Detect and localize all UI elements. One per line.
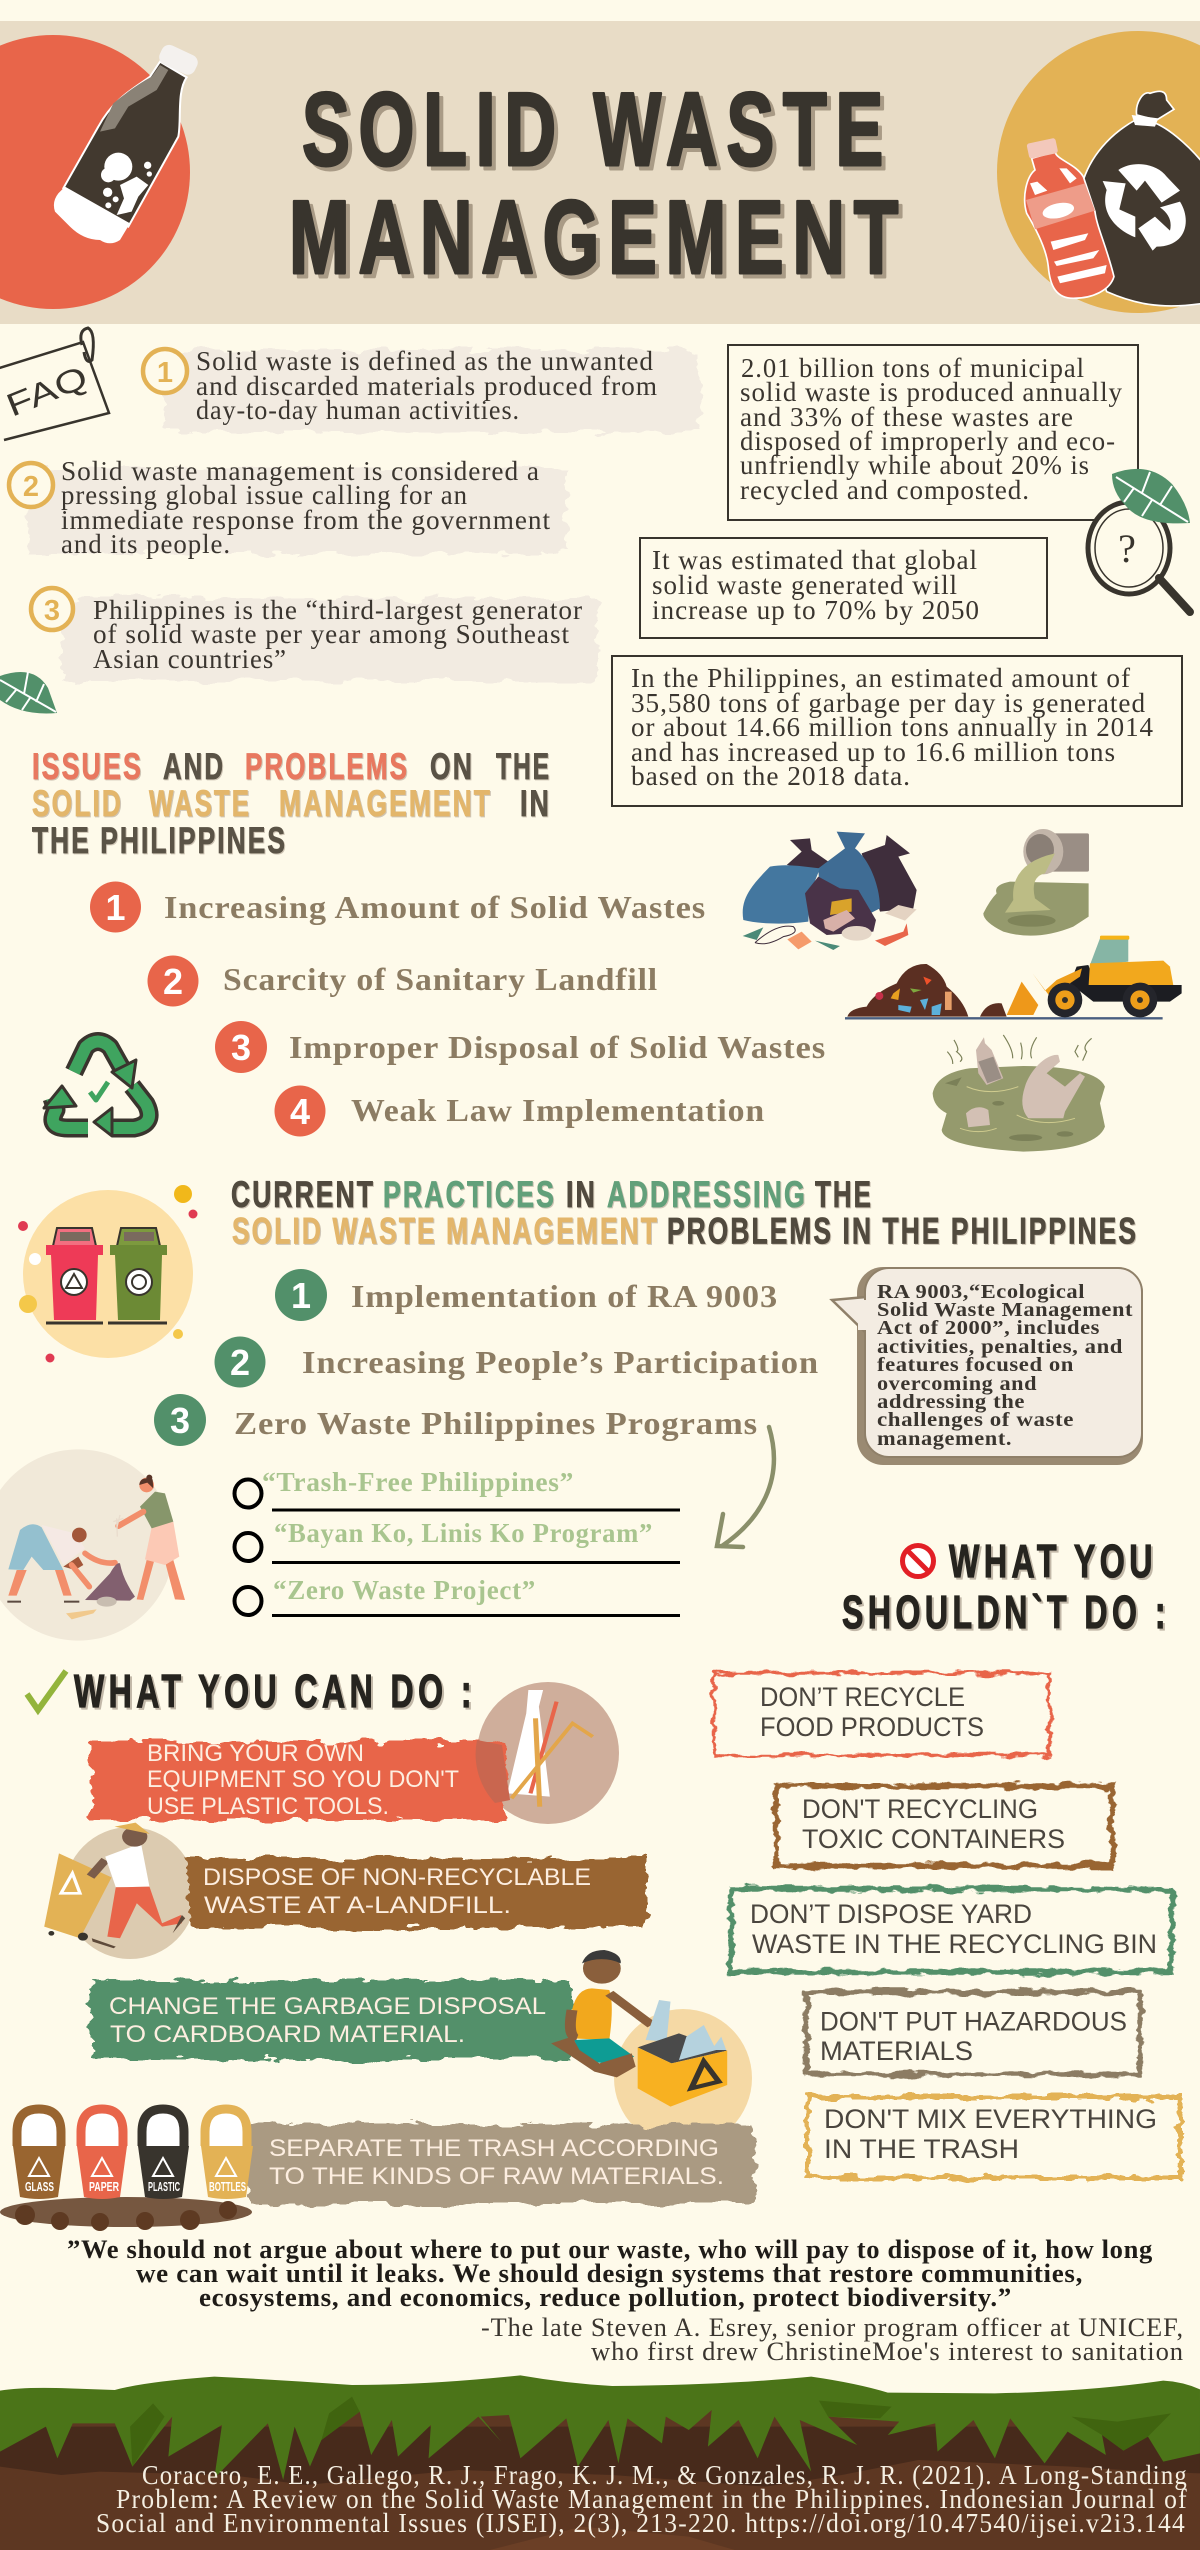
bin: bottles	[201, 2109, 253, 2199]
heading: issues and problems	[32, 746, 551, 861]
FAQ item 1: day-to-day human activities.	[196, 395, 520, 425]
illustration: worker with bin	[44, 1823, 196, 1959]
action 2: dispose at landfill	[44, 1823, 646, 1959]
callout: RA 9003: Act of 2000”, includes	[877, 1318, 1100, 1339]
action 4: separate the trash	[0, 2109, 755, 2231]
number badge 1: 1	[157, 357, 173, 389]
FAQ item 2: pressing global issue calling for an	[61, 480, 468, 510]
issue 4: Weak Law Implementation	[351, 1092, 765, 1128]
illustration: bag and straws	[477, 1682, 619, 1824]
don't 2: toxic containers: DON'T RECYCLING	[802, 1794, 1038, 1824]
info box: Philippines data: In the Philippines, an estimated amount of	[631, 663, 1131, 693]
info box: global tonnage: recycled and composted.	[740, 475, 1030, 505]
icon: magnifier with question mark	[1088, 502, 1190, 612]
action 1: bring your own equipment: EQUIPMENT SO YOU DON'T	[147, 1766, 459, 1793]
info box: global tonnage: solid waste is produced annually	[740, 377, 1123, 407]
program 1: “Trash-Free Philippines”	[262, 1467, 574, 1497]
practice 1	[275, 1269, 778, 1321]
red circle behind bottle	[0, 35, 190, 309]
callout: RA 9003	[832, 1267, 1143, 1465]
callout: RA 9003: features focused on	[877, 1355, 1074, 1376]
info box: global tonnage: 2.01 billion tons of municipal	[741, 353, 1085, 383]
issue 1: Increasing Amount of Solid Wastes	[164, 889, 706, 925]
action 4: separate the trash: SEPARATE THE TRASH ACCORDING	[269, 2135, 719, 2162]
issue 3	[215, 1021, 826, 1073]
issue 1	[90, 882, 706, 932]
don't 3: yard waste: WASTE IN THE RECYCLING BIN	[752, 1929, 1157, 1959]
heading: issues and problems: PROBLEMS	[245, 746, 409, 787]
info box: 2050 estimate: It was estimated that global	[652, 545, 978, 575]
don't 4: hazardous materials: DON'T PUT HAZARDOUS	[820, 2006, 1127, 2036]
bin: paper	[77, 2109, 127, 2199]
info box: Philippines data	[612, 656, 1182, 806]
programs list	[234, 1467, 680, 1616]
FAQ item 1	[143, 346, 700, 432]
practice 1: 1	[291, 1275, 311, 1316]
info box: global tonnage: disposed of improperly and eco-	[740, 426, 1116, 456]
number badge 3: 3	[44, 595, 60, 627]
action 1: bring your own equipment: USE PLASTIC TOOLS.	[147, 1793, 389, 1820]
action 2: dispose at landfill: WASTE AT A-LANDFILL.	[204, 1892, 511, 1919]
heading: current practices: SOLID WASTE MANAGEMENT	[232, 1210, 659, 1252]
yellow circle behind bag	[997, 31, 1200, 313]
practice 2	[214, 1336, 819, 1388]
title: SOLID WASTE	[302, 72, 892, 188]
don't 1: recycle food: FOOD PRODUCTS	[760, 1712, 984, 1742]
footer ground	[0, 2375, 1200, 2550]
issue 4: 4	[290, 1091, 310, 1132]
don't 1: recycle food	[714, 1673, 1050, 1755]
issue 2	[148, 956, 658, 1006]
don't 2: toxic containers: TOXIC CONTAINERS	[802, 1824, 1065, 1854]
callout: RA 9003: activities, penalties, and	[877, 1337, 1123, 1358]
FAQ item 3	[31, 588, 597, 681]
don't 1: recycle food: DON’T RECYCLE	[760, 1682, 965, 1712]
heading: current practices	[231, 1174, 1138, 1252]
icon: prohibited sign	[902, 1546, 934, 1576]
callout: RA 9003: management.	[877, 1429, 1012, 1450]
practice 3	[154, 1394, 758, 1446]
number badge 2: 2	[23, 471, 39, 503]
heading: current practices: CURRENT	[231, 1174, 375, 1215]
heading: issues and problems: THE	[496, 746, 551, 787]
callout: RA 9003: challenges of waste	[877, 1410, 1074, 1431]
action 1: bring your own equipment: BRING YOUR OWN	[147, 1740, 364, 1767]
bin: glass	[13, 2109, 65, 2199]
action 3: change garbage disposal	[90, 1950, 752, 2147]
bin: plastic: PLASTIC	[148, 2179, 180, 2194]
icon: sewage pipe	[983, 829, 1089, 936]
don't 5: mix everything: IN THE TRASH	[824, 2134, 1019, 2164]
issue 2: Scarcity of Sanitary Landfill	[223, 961, 658, 997]
quote: ”We should not argue about where to put our waste, who will pay to dispose of it, how long	[67, 2235, 1153, 2264]
number badge 3	[31, 588, 73, 630]
heading: current practices: PRACTICES	[383, 1174, 556, 1215]
heading: current practices: IN	[566, 1174, 597, 1215]
info box: Philippines data: or about 14.66 million tons annually in 2014	[631, 712, 1154, 742]
heading: issues and problems: WASTE	[149, 783, 251, 824]
don't 5: mix everything	[808, 2097, 1180, 2178]
info box: global tonnage: and 33% of these wastes are	[740, 402, 1074, 432]
green bin	[108, 1228, 167, 1323]
FAQ item 1: and discarded materials produced from	[196, 371, 658, 401]
heading: issues and problems: AND	[163, 746, 225, 787]
action 3: change garbage disposal: TO CARDBOARD MATERIAL.	[110, 2021, 465, 2048]
icon: right leaf	[1112, 469, 1190, 523]
program 3	[234, 1575, 680, 1616]
don't 4: hazardous materials	[806, 1992, 1140, 2074]
info box: Philippines data: 35,580 tons of garbage per day is generated	[631, 688, 1146, 718]
issues list	[90, 882, 826, 1136]
program 1	[234, 1467, 680, 1510]
callout: RA 9003: overcoming and	[877, 1374, 1037, 1395]
info box: 2050 estimate: increase up to 70% by 2050	[652, 595, 980, 625]
bin: paper: PAPER	[89, 2179, 119, 2194]
info box: 2050 estimate	[640, 538, 1047, 638]
reference citation	[96, 2460, 1188, 2538]
soil patch	[0, 2197, 252, 2231]
heading: what you can do	[27, 1665, 476, 1717]
action 1: bring your own equipment	[90, 1682, 619, 1824]
header band	[0, 21, 1200, 324]
icon: garbage bag and bottle	[1025, 91, 1200, 306]
illustration: four sorted bins on soil	[0, 2109, 253, 2231]
program 3: “Zero Waste Project”	[273, 1575, 536, 1605]
FAQ item 2: and its people.	[61, 529, 231, 559]
FAQ icon: FAQ	[1, 359, 93, 423]
FAQ item 3: Philippines is the “third-largest generator	[93, 595, 583, 625]
heading: what you shouldn't do	[842, 1535, 1170, 1638]
title	[289, 72, 907, 296]
FAQ item 3: of solid waste per year among Southeast	[93, 619, 570, 649]
practice 3: 3	[170, 1400, 190, 1441]
arrow: curved pointer	[717, 1427, 774, 1547]
FAQ item 3: Asian countries”	[93, 644, 287, 674]
don't 3: yard waste	[731, 1889, 1172, 1972]
heading: issues and problems: ISSUES	[32, 746, 143, 787]
practices list	[154, 1269, 819, 1446]
quote: ecosystems, and economics, reduce pollution, protect biodiversity.”	[199, 2283, 1012, 2312]
program 2	[234, 1518, 680, 1562]
icon: check mark	[27, 1671, 66, 1710]
number badge 2	[9, 463, 53, 507]
callout: RA 9003: RA 9003,“Ecological	[877, 1282, 1085, 1303]
quote attribution: who first drew ChristineMoe's interest to sanitation	[591, 2337, 1184, 2366]
issue 3: Improper Disposal of Solid Wastes	[289, 1029, 826, 1065]
icon: recycle arrows	[44, 1042, 149, 1136]
program 2: “Bayan Ko, Linis Ko Program”	[274, 1518, 653, 1548]
issue 2: 2	[163, 961, 183, 1002]
heading: what you can do: WHAT YOU CAN DO :	[74, 1665, 476, 1717]
FAQ item 1: Solid waste is defined as the unwanted	[196, 346, 654, 376]
issue 4	[274, 1086, 765, 1136]
callout: RA 9003: addressing the	[877, 1392, 1025, 1413]
icon: polluted swamp	[933, 1035, 1105, 1152]
info box: global tonnage: unfriendly while about 20% is	[740, 450, 1090, 480]
FAQ item 2: immediate response from the government	[61, 505, 551, 535]
heading: issues and problems: IN	[520, 783, 551, 824]
icon: magnifier with question mark: ?	[1118, 526, 1136, 571]
FAQ item 2	[9, 456, 566, 559]
practice 2: Increasing People’s Participation	[302, 1344, 819, 1380]
action 3: change garbage disposal: CHANGE THE GARBAGE DISPOSAL	[109, 1993, 546, 2020]
callout: RA 9003: Solid Waste Management	[877, 1300, 1133, 1321]
icon: landfill and loader	[845, 936, 1182, 1018]
title: MANAGEMENT	[289, 180, 907, 296]
icon: garbage bags	[743, 832, 917, 950]
heading: current practices: THE	[815, 1174, 873, 1215]
heading: issues and problems: ON	[430, 746, 474, 787]
icon: recycling bins with dots	[18, 1185, 198, 1362]
practice 2: 2	[230, 1342, 250, 1383]
heading: issues and problems: THE PHILIPPINES	[32, 820, 287, 861]
issue 1: 1	[105, 887, 126, 928]
practice 3: Zero Waste Philippines Programs	[234, 1405, 758, 1441]
illustration: people collecting trash	[0, 1449, 185, 1641]
don't 3: yard waste: DON’T DISPOSE YARD	[750, 1899, 1032, 1929]
FAQ item 2: Solid waste management is considered a	[61, 456, 540, 486]
info box: global tonnage	[728, 345, 1138, 520]
info box: Philippines data: and has increased up to 16.6 million tons	[631, 737, 1116, 767]
don't 4: hazardous materials: MATERIALS	[820, 2036, 973, 2066]
quote	[67, 2235, 1153, 2312]
bin: glass: GLASS	[25, 2179, 54, 2194]
issue 3: 3	[231, 1027, 251, 1068]
bin: bottles: BOTTLES	[209, 2179, 246, 2194]
quote: we can wait until it leaks. We should design systems that restore communities,	[136, 2259, 1083, 2288]
number badge 1	[143, 349, 187, 393]
heading: issues and problems: MANAGEMENT	[279, 783, 492, 824]
action 4: separate the trash: TO THE KINDS OF RAW MATERIALS.	[269, 2163, 724, 2190]
quote attribution: -The late Steven A. Esrey, senior program officer at UNICEF,	[481, 2313, 1184, 2342]
bin: plastic	[138, 2109, 189, 2199]
illustration: child with recycling box	[551, 1950, 752, 2147]
FAQ icon	[0, 328, 109, 440]
action 2: dispose at landfill: DISPOSE OF NON-RECYCLABLE	[203, 1864, 591, 1891]
heading: issues and problems: SOLID	[32, 783, 123, 824]
quote attribution	[481, 2313, 1184, 2366]
heading: current practices: ADDRESSING	[607, 1174, 807, 1215]
don't 5: mix everything: DON'T MIX EVERYTHING	[824, 2104, 1157, 2134]
practice 1: Implementation of RA 9003	[351, 1278, 778, 1314]
info box: 2050 estimate: solid waste generated will	[652, 570, 958, 600]
icon: bottle	[54, 42, 200, 243]
icon: left leaf	[0, 672, 57, 713]
don't 2: toxic containers	[776, 1786, 1112, 1866]
red bin	[46, 1228, 103, 1323]
info box: Philippines data: based on the 2018 data.	[631, 761, 911, 791]
